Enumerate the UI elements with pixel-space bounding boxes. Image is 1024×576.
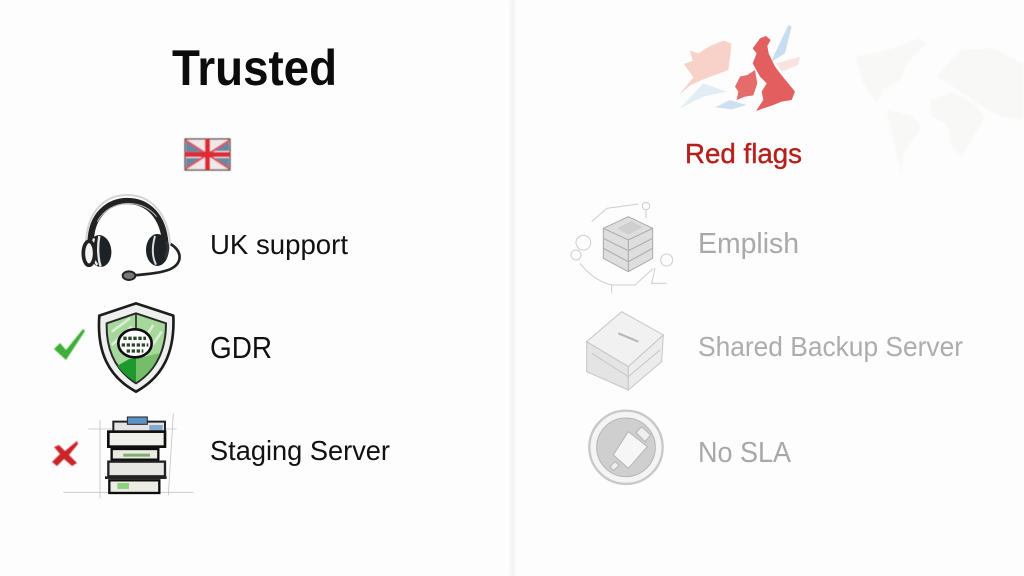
icon: UK flag bbox=[185, 139, 230, 170]
icon: faded world map bbox=[855, 38, 1023, 175]
icon: red cross bbox=[52, 441, 78, 466]
icon: faded server box bbox=[587, 312, 663, 390]
label: GDR: GDR bbox=[210, 330, 272, 365]
icon: faded circle badge bbox=[589, 411, 663, 484]
icon: green check bbox=[54, 329, 85, 360]
heading: Red flags: Red flags bbox=[685, 138, 802, 169]
label: Emplish: Emplish bbox=[698, 228, 799, 260]
label: No SLA: No SLA bbox=[698, 437, 792, 469]
icon: server stack bbox=[63, 413, 193, 498]
icon: faded network cube bbox=[571, 202, 673, 293]
heading: Trusted: Trusted bbox=[172, 40, 337, 96]
icon: green shield bbox=[99, 303, 173, 392]
icon: headset bbox=[83, 195, 180, 280]
icon: UK and Ireland map bbox=[679, 25, 800, 111]
panel: trusted bbox=[52, 40, 390, 498]
label: Shared Backup Server: Shared Backup Server bbox=[698, 331, 963, 362]
label: UK support: UK support bbox=[210, 229, 348, 260]
panel: red flags bbox=[571, 25, 1023, 484]
label: Staging Server: Staging Server bbox=[210, 435, 390, 466]
